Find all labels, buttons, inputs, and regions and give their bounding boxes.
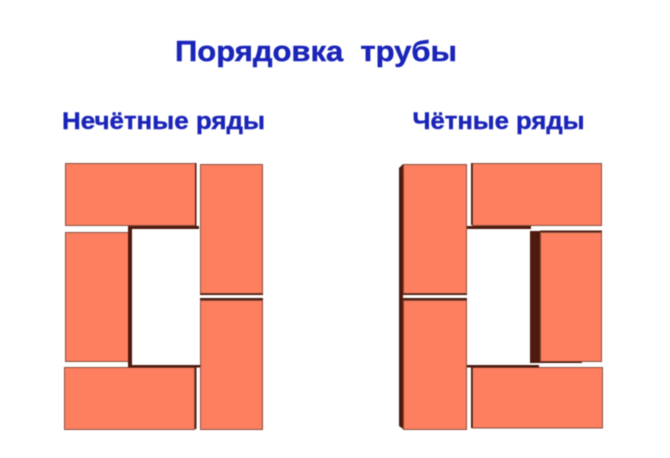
shadow edges [399,163,602,428]
brick: left side face [399,164,403,429]
brick: top horizontal [472,164,602,226]
shadow edges [128,163,263,429]
panel: odd rows brick layout [64,163,263,430]
brick: bottom horizontal [472,368,602,428]
heading: even rows: Чётные ряды [412,108,584,135]
brick: left lower vertical [404,300,466,430]
panel: even rows brick layout [399,163,602,430]
brick: right lower vertical [200,300,262,430]
brick: right upper vertical [200,164,262,294]
title: Порядовка трубы [175,36,457,68]
brick: top horizontal [66,164,196,226]
brick: left vertical [66,232,128,362]
brick: bottom horizontal [64,368,194,430]
brick: left upper vertical [404,164,466,294]
heading: odd rows: Нечётные ряды [62,108,265,135]
brick: right vertical [540,232,602,362]
